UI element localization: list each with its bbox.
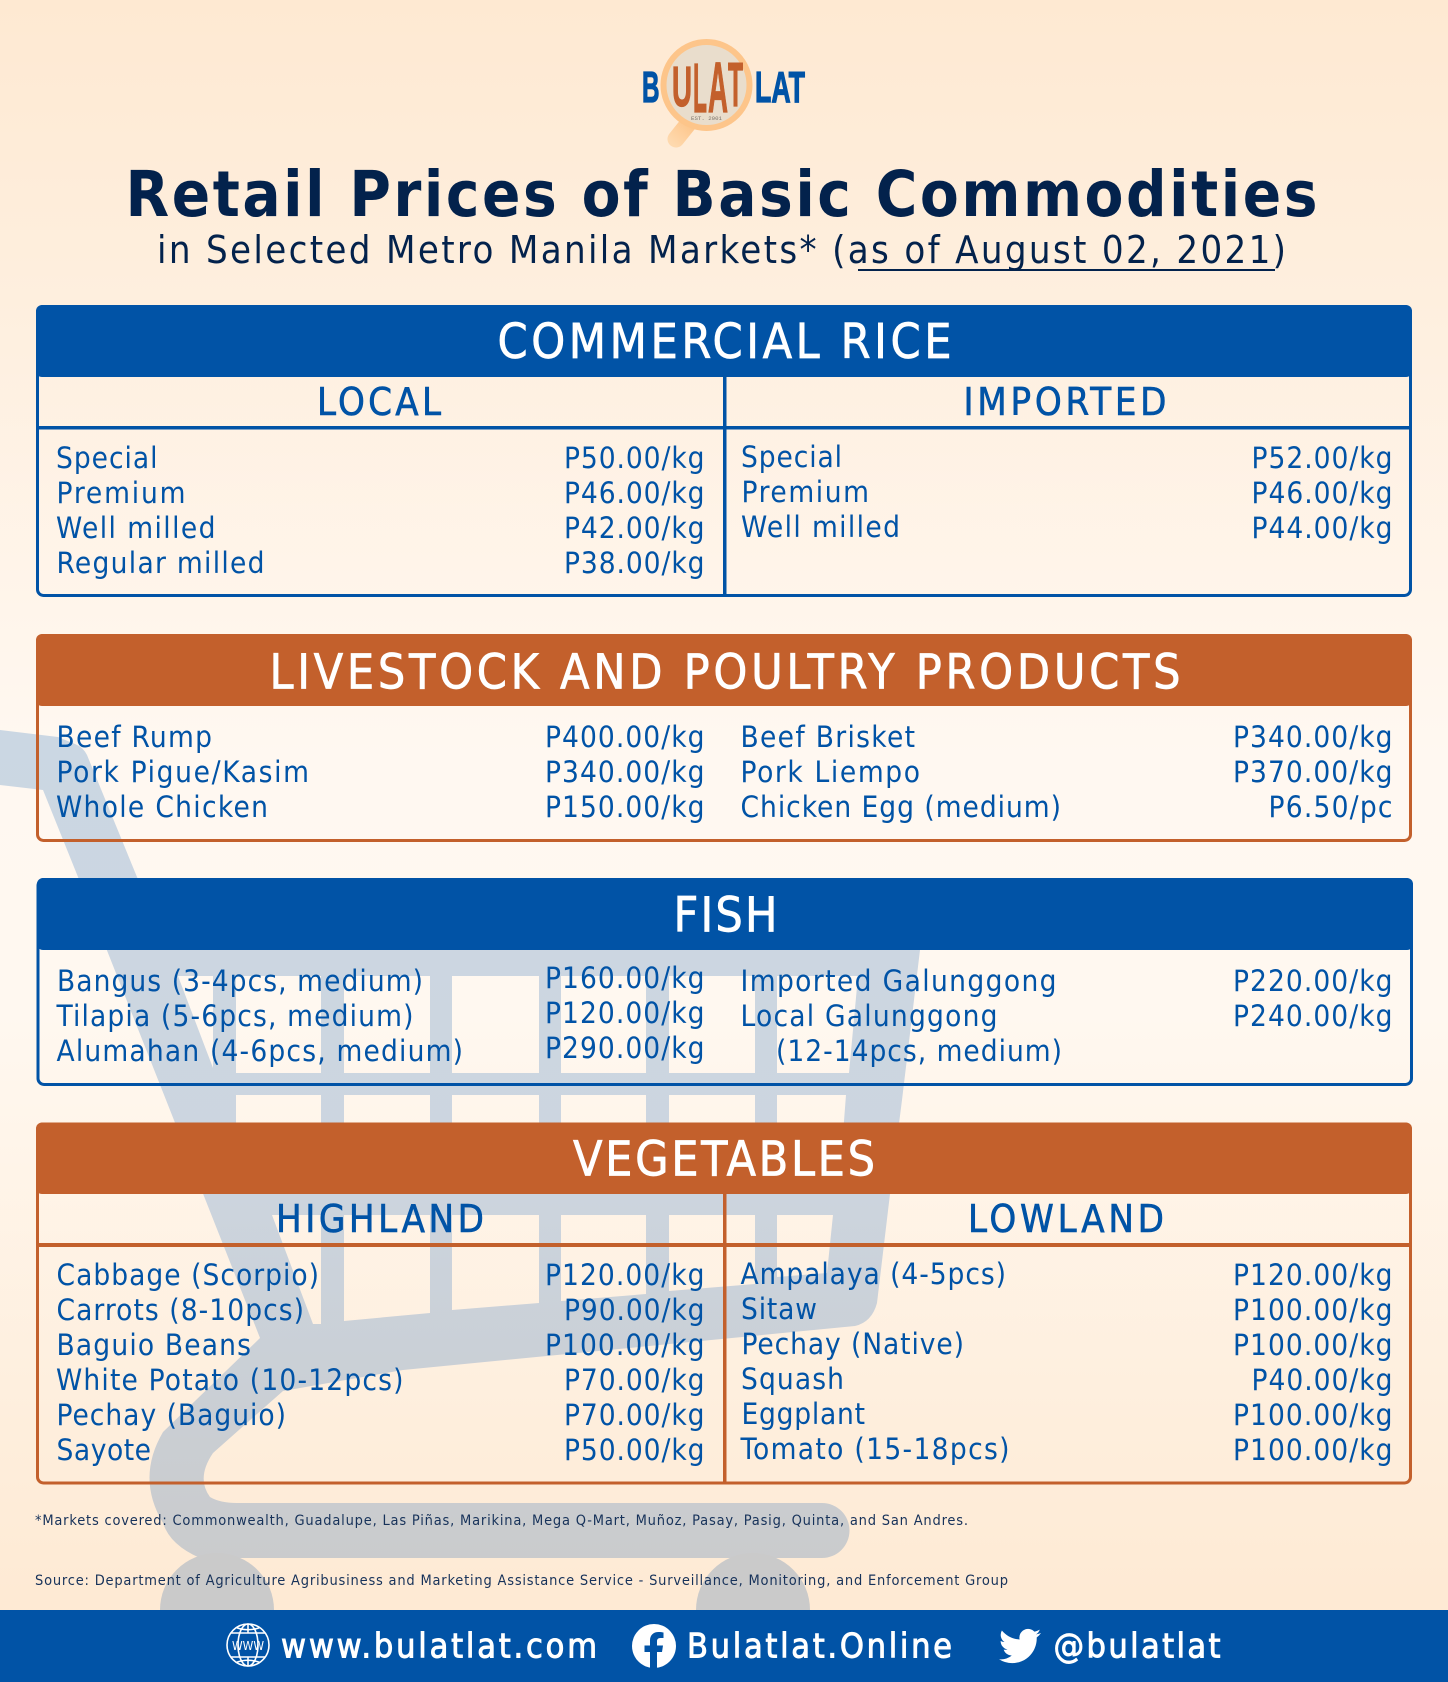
list: local rice prices [56, 441, 704, 580]
list: highland vegetables: P120.00/kg [545, 1258, 704, 1292]
logo: Bulatlat [642, 42, 805, 139]
icon: globe [227, 1624, 269, 1666]
logo wordmark: B [642, 63, 660, 112]
list: imported rice prices: P52.00/kg [1252, 441, 1392, 475]
heading: commercial rice [36, 305, 1412, 377]
list: lowland vegetables: Squash [741, 1362, 844, 1396]
list: highland vegetables: Carrots (8-10pcs) [56, 1293, 304, 1327]
list: lowland vegetables: Sitaw [741, 1292, 817, 1326]
shopping cart watermark [0, 730, 923, 1667]
list: highland vegetables: White Potato (10-12pcs) [56, 1363, 404, 1397]
list: fish right column: (12-14pcs, medium) [776, 1034, 1062, 1068]
list: fish left column: Tilapia (5-6pcs, medium) [56, 999, 414, 1033]
list: fish left column: Bangus (3-4pcs, medium) [57, 964, 423, 998]
list: local rice prices: P42.00/kg [564, 511, 704, 545]
icon: facebook [632, 1624, 676, 1668]
icon: twitter bird [999, 1629, 1041, 1663]
list: imported rice prices: P46.00/kg [1252, 476, 1392, 510]
facebook name: Bulatlat.Online [687, 1626, 952, 1666]
list: fish left column [56, 961, 704, 1068]
list: livestock right column: Beef Brisket [740, 720, 915, 754]
list: lowland vegetables: Eggplant [742, 1397, 865, 1431]
logo wordmark: U [672, 55, 692, 119]
icon: magnifying glass [664, 42, 750, 139]
logo wordmark: T [728, 51, 743, 120]
list: local rice prices: P50.00/kg [564, 441, 704, 475]
list: local rice prices: Well milled [56, 511, 216, 545]
list: lowland vegetables: Pechay (Native) [742, 1327, 964, 1361]
list: lowland vegetables: P100.00/kg [1233, 1328, 1392, 1362]
panel: livestock and poultry products [36, 634, 1412, 840]
list: livestock right column: P6.50/pc [1268, 790, 1392, 824]
subtitle: in Selected Metro Manila Markets* (as of August 02, 2021) [157, 228, 1286, 272]
list: fish right column: Imported Galunggong [740, 964, 1056, 998]
logo wordmark: EST. 2001 [691, 115, 723, 122]
list: local rice prices: Premium [56, 476, 186, 510]
list: imported rice prices: Premium [742, 475, 869, 509]
list: lowland vegetables: P100.00/kg [1233, 1293, 1392, 1327]
list: fish left column: P290.00/kg [545, 1031, 704, 1065]
twitter handle: @bulatlat [1054, 1626, 1220, 1666]
list: fish right column [740, 964, 1392, 1068]
list: highland vegetables: P50.00/kg [564, 1433, 704, 1467]
list: livestock right column: Chicken Egg (medium) [740, 790, 1061, 824]
list: highland vegetables: Baguio Beans [56, 1328, 251, 1362]
list: imported rice prices [741, 440, 1392, 545]
heading: fish: FISH [674, 888, 778, 944]
list: livestock left column: P340.00/kg [545, 755, 704, 789]
list: highland vegetables: P70.00/kg [564, 1398, 704, 1432]
title: Retail Prices of Basic Commodities [126, 158, 1318, 231]
list: livestock right column [740, 720, 1392, 824]
list: fish left column: Alumahan (4-6pcs, medium) [56, 1034, 463, 1068]
heading: vegetables: VEGETABLES [573, 1132, 875, 1188]
list: highland vegetables: P100.00/kg [545, 1328, 704, 1362]
list: fish right column: P220.00/kg [1233, 964, 1392, 998]
list: local rice prices: Special [56, 441, 158, 475]
list: livestock right column: P370.00/kg [1233, 755, 1392, 789]
list: highland vegetables [56, 1258, 704, 1467]
logo wordmark: A [708, 49, 728, 128]
list: fish left column: P160.00/kg [545, 961, 704, 995]
list: livestock left column: Whole Chicken [56, 790, 268, 824]
list: livestock left column: Beef Rump [56, 720, 212, 754]
list: livestock right column: P340.00/kg [1233, 720, 1392, 754]
subheading: lowland: LOWLAND [968, 1197, 1164, 1241]
list: lowland vegetables: P100.00/kg [1233, 1433, 1392, 1467]
list: highland vegetables: P70.00/kg [564, 1363, 704, 1397]
heading: livestock and poultry products: LIVESTOCK AND POULTRY PRODUCTS [270, 644, 1180, 700]
list: lowland vegetables: Tomato (15-18pcs) [740, 1432, 1010, 1466]
heading: vegetables [36, 1122, 1412, 1194]
heading: commercial rice: COMMERCIAL RICE [498, 314, 952, 370]
icon: globe: WWW [232, 1639, 264, 1653]
list: local rice prices: P38.00/kg [564, 546, 704, 580]
list: fish right column: Local Galunggong [740, 999, 998, 1033]
list: livestock left column [56, 720, 704, 824]
logo wordmark: LAT [755, 63, 805, 112]
list: livestock left column: P150.00/kg [545, 790, 704, 824]
footer bar [0, 1610, 1448, 1682]
heading: livestock and poultry products [36, 634, 1412, 706]
list: livestock left column: Pork Pigue/Kasim [56, 755, 309, 789]
panel: commercial rice [36, 305, 1412, 596]
list: livestock right column: Pork Liempo [740, 755, 920, 789]
list: imported rice prices: Well milled [741, 510, 900, 544]
list: lowland vegetables [740, 1257, 1392, 1467]
list: lowland vegetables: Ampalaya (4-5pcs) [740, 1257, 1006, 1291]
list: lowland vegetables: P40.00/kg [1252, 1363, 1392, 1397]
list: imported rice prices: Special [741, 440, 842, 474]
list: highland vegetables: Pechay (Baguio) [56, 1398, 286, 1432]
panel: fish [37, 878, 1413, 1084]
list: fish left column: P120.00/kg [545, 996, 704, 1030]
subheading: imported: IMPORTED [964, 380, 1166, 424]
subheading: highland: HIGHLAND [276, 1197, 484, 1241]
panel: vegetables [36, 1122, 1412, 1483]
heading: fish [37, 878, 1413, 950]
list: local rice prices: Regular milled [56, 546, 264, 580]
source note: Source: Department of Agriculture Agribusiness and Marketing Assistance Service - Surveillance, Monitoring, and Enforcement Group [35, 1573, 1008, 1589]
website: www.bulatlat.com [281, 1626, 597, 1666]
list: highland vegetables: Sayote [56, 1433, 151, 1467]
list: fish right column: P240.00/kg [1233, 999, 1392, 1033]
list: highland vegetables: P90.00/kg [564, 1293, 704, 1327]
list: lowland vegetables: P100.00/kg [1233, 1398, 1392, 1432]
logo wordmark [642, 49, 805, 128]
list: lowland vegetables: P120.00/kg [1233, 1258, 1392, 1292]
logo wordmark: L [693, 49, 707, 127]
list: local rice prices: P46.00/kg [564, 476, 704, 510]
list: imported rice prices: P44.00/kg [1252, 511, 1392, 545]
list: livestock left column: P400.00/kg [545, 720, 704, 754]
list: highland vegetables: Cabbage (Scorpio) [56, 1258, 319, 1292]
footnote: markets covered: *Markets covered: Commonwealth, Guadalupe, Las Piñas, Marikina, Mega Q-Mart, Muñoz, Pasay, Pasig, Quinta, and San Andres. [35, 1513, 968, 1529]
subheading: local: LOCAL [317, 380, 441, 424]
